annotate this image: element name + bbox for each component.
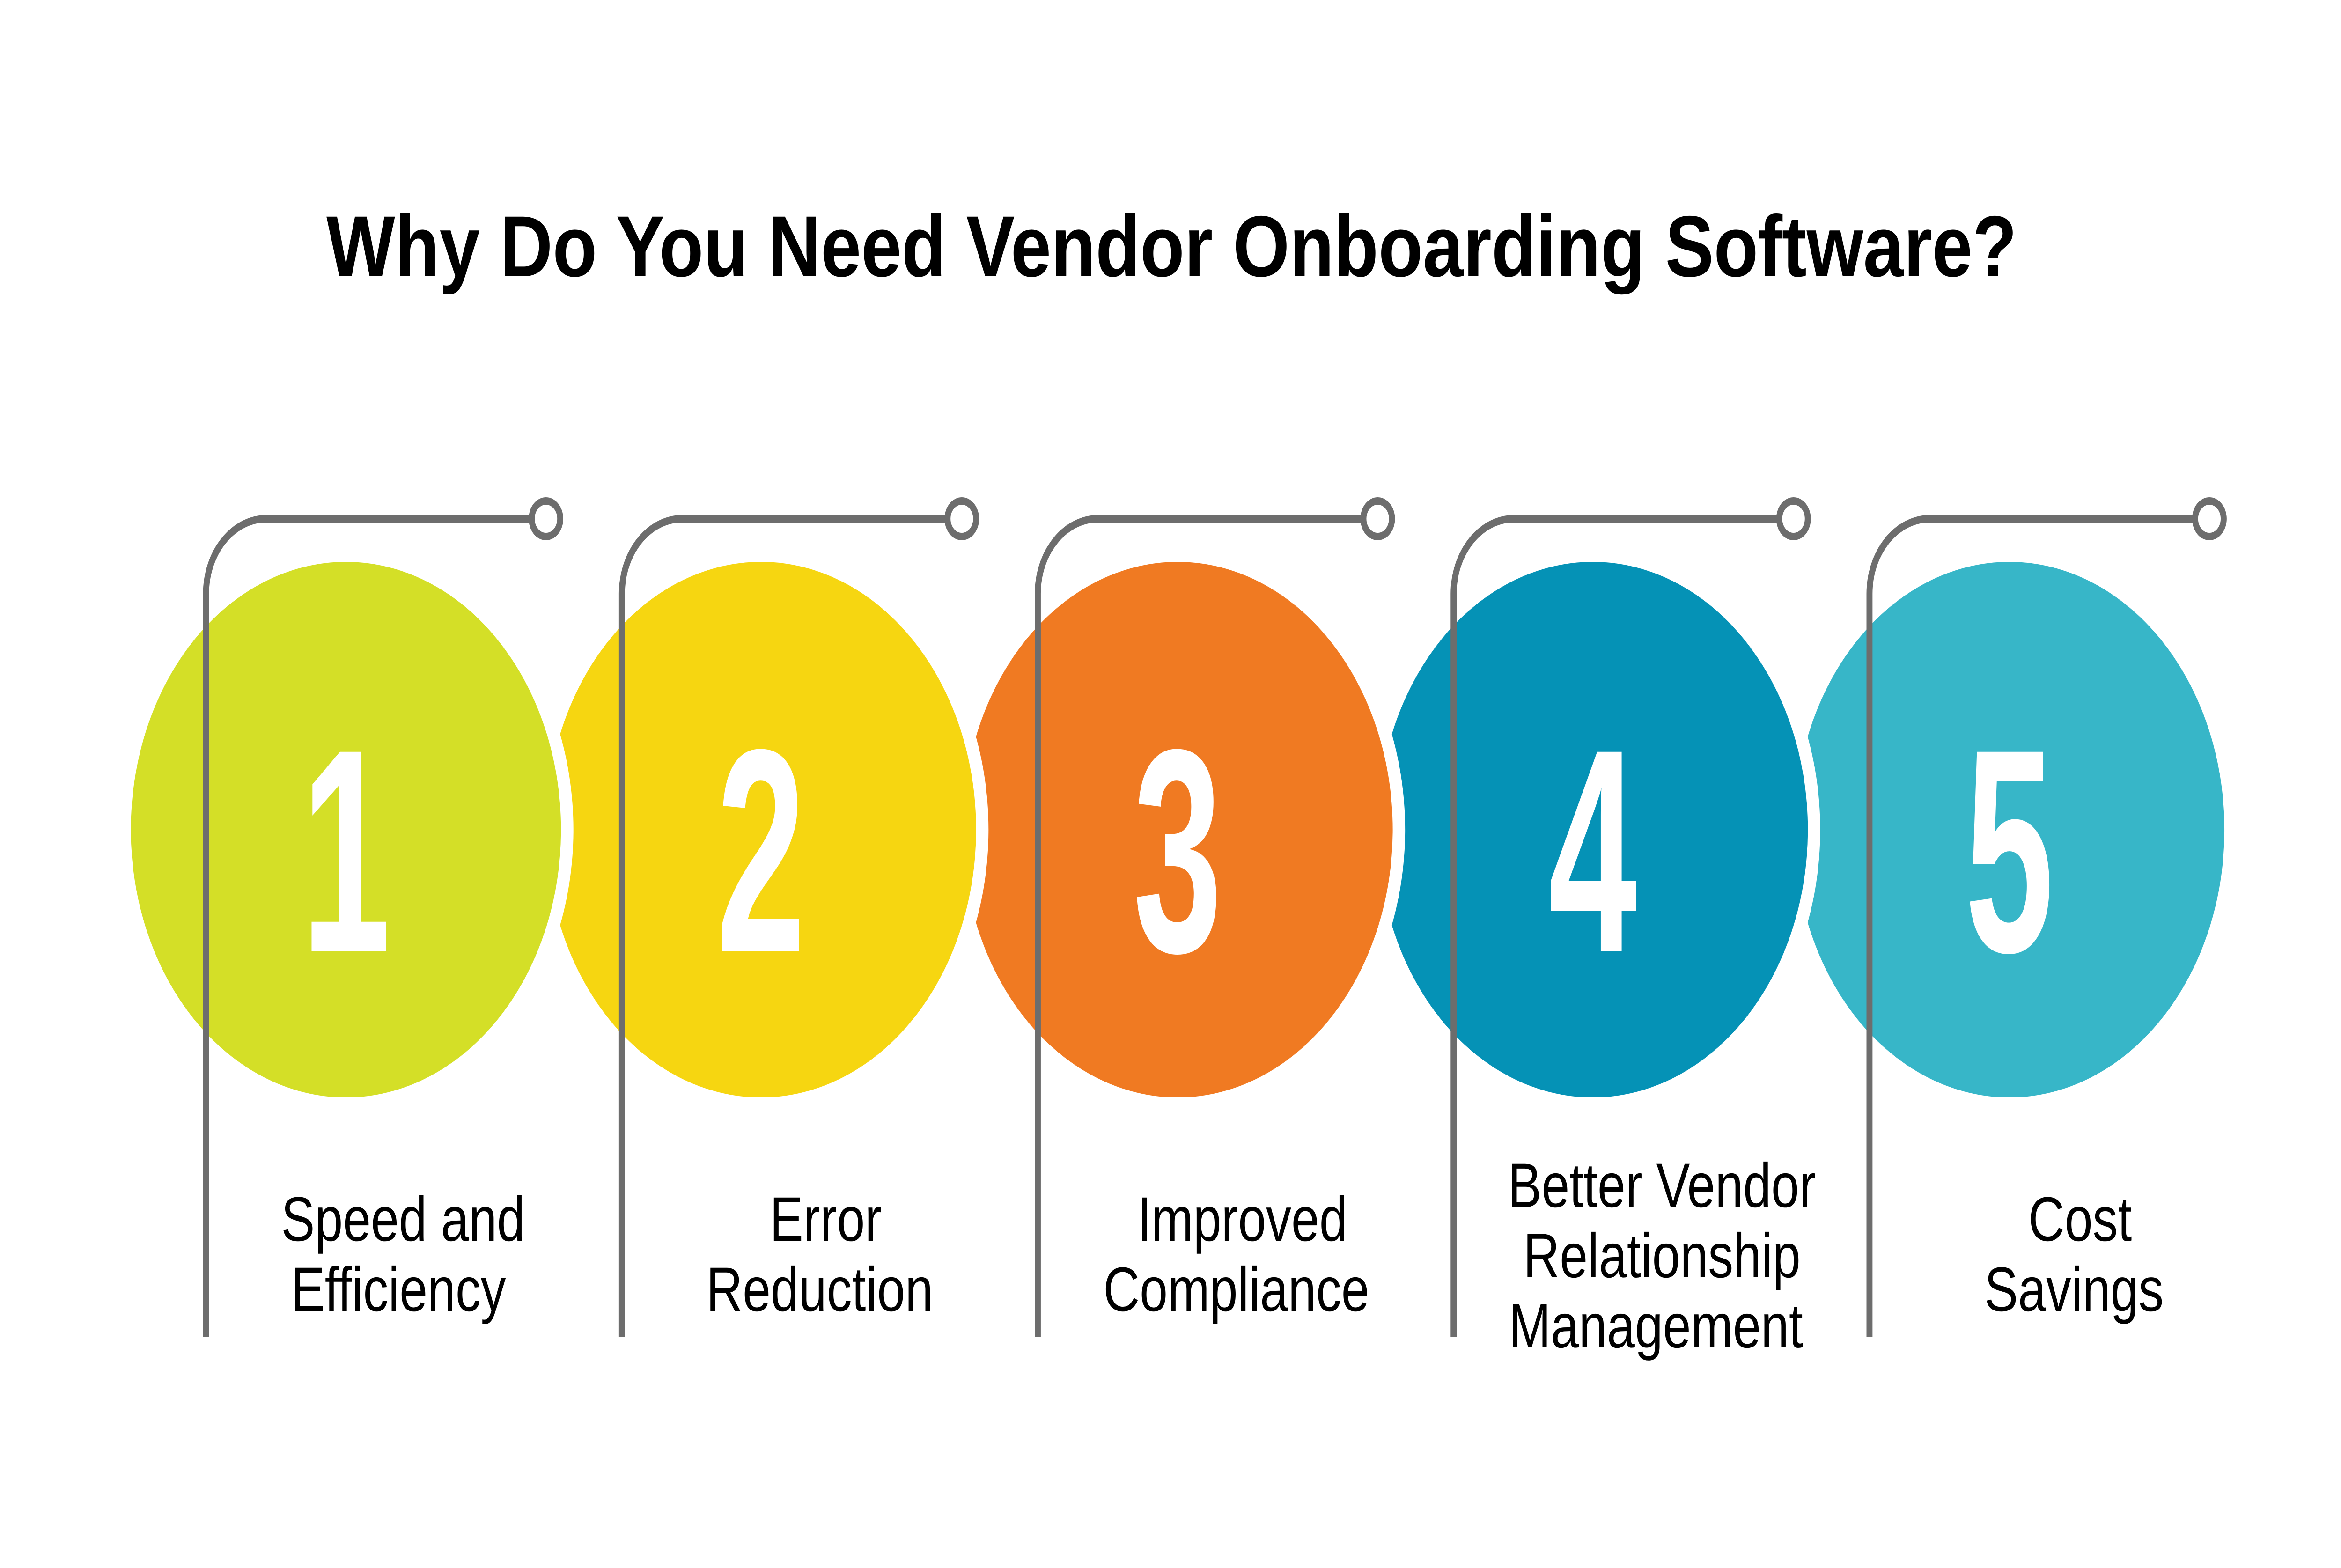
label 5: Cost: [2028, 1184, 2132, 1254]
connector line 2: [622, 501, 976, 1337]
label 2: Error: [770, 1184, 882, 1254]
connector line 1: [206, 501, 560, 1337]
title: Why Do You Need Vendor Onboarding Software?: [326, 198, 2017, 295]
label 4: Management: [1509, 1291, 1803, 1361]
connector line 5: [1870, 501, 2223, 1337]
connector line 4: [1454, 501, 1808, 1337]
circle 4: [1365, 546, 1820, 1113]
label 3: Improved: [1137, 1184, 1347, 1254]
label 2: Reduction: [706, 1254, 933, 1325]
circle 1: [118, 546, 574, 1113]
circle 5: [1782, 546, 2237, 1113]
label 4: Better Vendor: [1508, 1150, 1816, 1221]
number 4: 4: [1548, 689, 1638, 1013]
circle 2: [534, 546, 988, 1113]
label 1: Efficiency: [291, 1254, 506, 1325]
connector line 3: [1038, 501, 1392, 1337]
label 5: Savings: [1984, 1254, 2164, 1325]
label 4: Relationship: [1524, 1221, 1801, 1291]
number 1: 1: [302, 689, 390, 1013]
label 1: Speed and: [281, 1184, 525, 1254]
number 3: 3: [1133, 689, 1222, 1013]
number 5: 5: [1965, 689, 2054, 1013]
number 2: 2: [717, 689, 805, 1013]
label 3: Compliance: [1103, 1254, 1369, 1325]
circle 3: [950, 546, 1405, 1113]
